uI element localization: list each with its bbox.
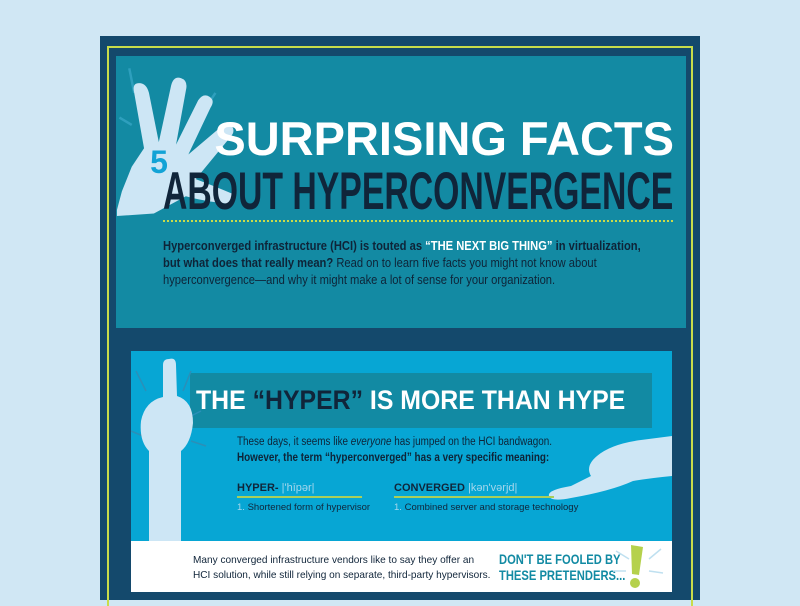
title line 1: SURPRISING FACTS [214, 112, 674, 165]
definition: hyper [237, 482, 362, 498]
border lines [107, 46, 693, 606]
callout heading [499, 551, 625, 583]
intro text: but what does that really mean? Read on to learn five facts you might not know about [163, 255, 597, 270]
headline: THE “HYPER” IS MORE THAN HYPE [196, 385, 625, 415]
callout heading: DON'T BE FOOLED BY [499, 551, 621, 567]
frame [100, 36, 700, 600]
definition: converged [394, 482, 554, 498]
intro text: However, the term “hyperconverged” has a very specific meaning: [237, 452, 549, 464]
intro text: hyperconvergence—and why it might make a lot of sense for your organization. [163, 272, 555, 287]
intro text [237, 436, 552, 464]
panel: header [116, 56, 686, 328]
intro text: Hyperconverged infrastructure (HCI) is touted as “THE NEXT BIG THING” in virtualization, [163, 238, 641, 253]
icon: exclamation [613, 545, 663, 588]
definition: hyper: HYPER- |'hīpər| [237, 482, 315, 494]
panel: fact 1 [131, 351, 672, 592]
dotted divider [163, 220, 673, 222]
panel: fact 1: 1. Combined server and storage technology [394, 502, 578, 513]
icon: hand with 5 [116, 68, 234, 216]
icon: pointing up hand [131, 358, 206, 541]
definition: converged: CONVERGED |kən'vərjd| [394, 482, 517, 494]
callout text: HCI solution, while still relying on separate, third-party hypervisors. [193, 569, 490, 581]
headline band [190, 373, 652, 428]
callout text: Many converged infrastructure vendors like to say they offer an [193, 554, 474, 566]
callout heading: THESE PRETENDERS... [499, 567, 625, 583]
intro text: These days, it seems like everyone has jumped on the HCI bandwagon. [237, 436, 552, 448]
icon: hand with 5: 5 [150, 144, 168, 180]
callout text [193, 554, 490, 581]
panel: fact 1: 1. Shortened form of hypervisor [237, 502, 370, 513]
icon: pointing hand right [548, 436, 672, 500]
callout: pretenders [131, 541, 672, 592]
intro text [163, 238, 641, 287]
title line 2: ABOUT HYPERCONVERGENCE [163, 162, 673, 221]
